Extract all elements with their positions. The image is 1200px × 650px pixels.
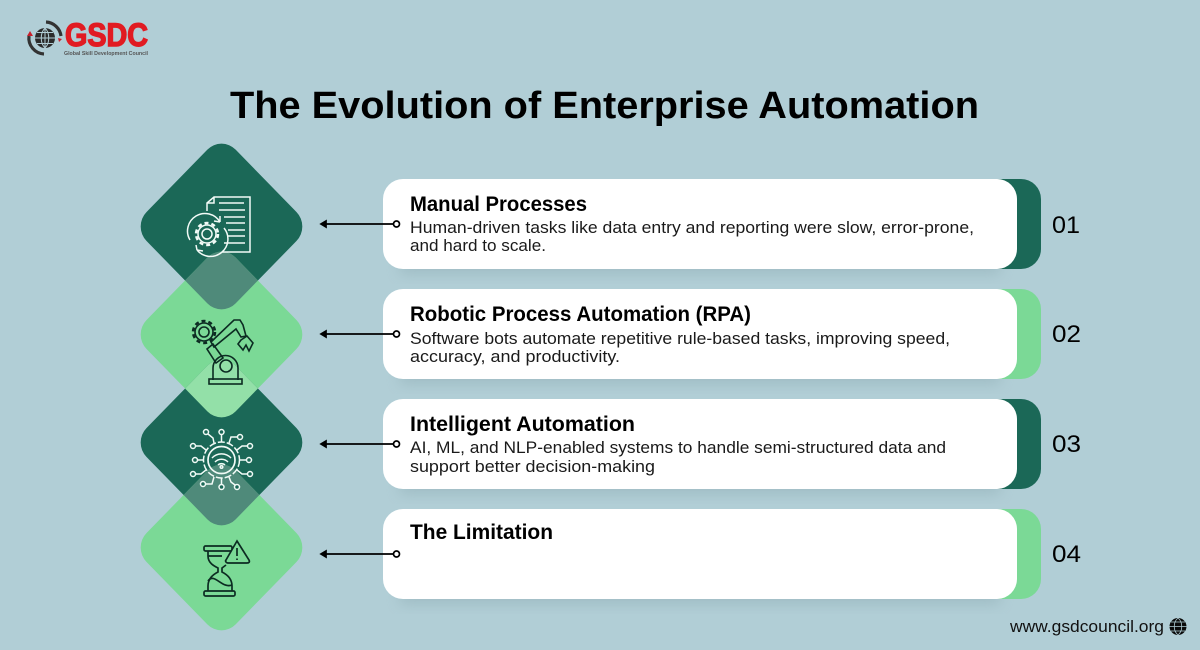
item 4: [321, 509, 1081, 604]
card: [383, 509, 1017, 599]
diamond 1: dark: [132, 135, 311, 318]
card: [383, 399, 1017, 489]
icon: globe: [1170, 618, 1186, 635]
logo: GSDC: [27, 17, 148, 57]
connector arrow: [321, 221, 400, 227]
icon: document with gear: [188, 197, 250, 256]
icon: robot arm with gear: [193, 320, 253, 384]
item 1: [321, 179, 1080, 274]
heading: The Limitation: [410, 521, 553, 544]
item 2: [321, 289, 1081, 384]
number: 02: [1052, 321, 1081, 348]
logo: GSDC: GSDC: [65, 17, 148, 53]
diamond 2: light: [132, 243, 311, 426]
heading: Intelligent Automation: [410, 413, 635, 436]
diamond stack: [140, 144, 302, 630]
item 3: [321, 399, 1081, 494]
shadow: [400, 250, 1000, 274]
connector arrow: [321, 441, 400, 447]
overlap 3-4: [184, 464, 260, 526]
connector arrow: [321, 551, 400, 557]
tab: [980, 289, 1041, 379]
website: www.gsdcouncil.org: [1009, 617, 1164, 636]
number: 03: [1052, 431, 1081, 458]
description line 2: accuracy, and productivity.: [410, 347, 620, 366]
tab: [980, 509, 1041, 599]
description line 2: support better decision-making: [410, 457, 655, 476]
number: 01: [1052, 212, 1080, 239]
icon: hourglass with warning: [204, 541, 249, 596]
icon: AI chip with wifi: [190, 430, 252, 490]
shadow: [400, 360, 1000, 384]
logo: GSDC: Global Skill Development Council: [64, 51, 148, 57]
shadow: [400, 470, 1000, 494]
overlap 2-3: [185, 360, 258, 418]
heading: Robotic Process Automation (RPA): [410, 303, 751, 326]
connector arrow: [321, 331, 400, 337]
card: [383, 289, 1017, 379]
description: Software bots automate repetitive rule-based tasks, improving speed,: [410, 329, 950, 348]
diamond 4: light: [132, 456, 311, 639]
description line 2: and hard to scale.: [410, 236, 546, 255]
tab: [980, 179, 1041, 269]
description: AI, ML, and NLP-enabled systems to handle semi-structured data and: [410, 438, 946, 457]
shadow: [400, 580, 1000, 604]
tab: [980, 399, 1041, 489]
description: Human-driven tasks like data entry and reporting were slow, error-prone,: [410, 218, 974, 237]
card: [383, 179, 1017, 269]
number: 04: [1052, 541, 1081, 568]
heading: Manual Processes: [410, 193, 587, 216]
diamond 3: dark: [132, 351, 311, 534]
overlap 1-2: [185, 252, 258, 310]
title: The Evolution of Enterprise Automation: [230, 85, 979, 127]
